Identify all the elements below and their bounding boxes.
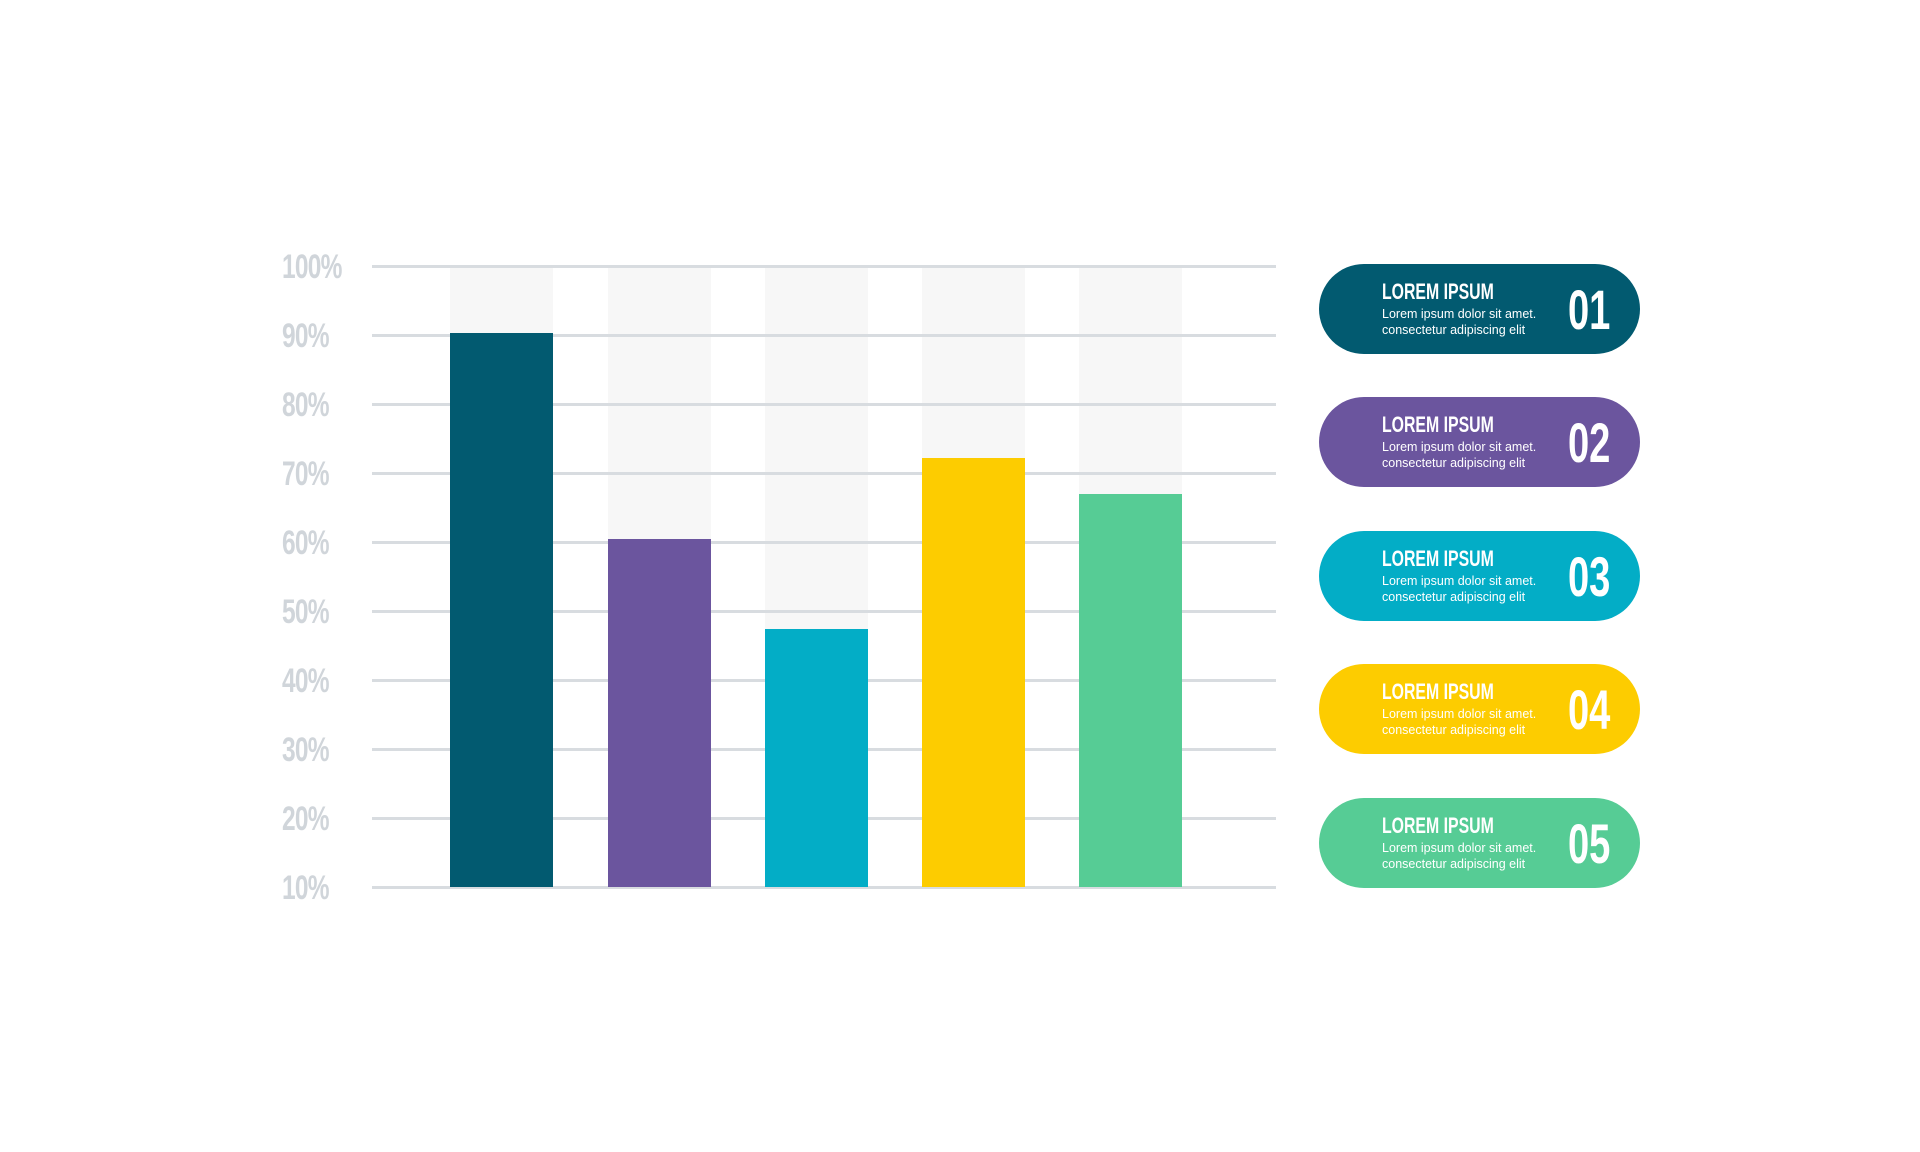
legend pill 02: LOREM IPSUM (1382, 412, 1494, 437)
legend pill 03: consectetur adipiscing elit (1382, 590, 1525, 604)
legend pill 01 (1319, 264, 1640, 354)
chart (282, 248, 1276, 907)
chart: 50% (282, 593, 329, 631)
chart: 70% (282, 455, 329, 493)
legend pill 01: LOREM IPSUM (1382, 279, 1494, 304)
bar 1 (450, 333, 553, 887)
legend pill 03: LOREM IPSUM (1382, 546, 1494, 571)
legend pill 01: 01 (1568, 278, 1610, 341)
legend pill 03: Lorem ipsum dolor sit amet. (1382, 574, 1536, 588)
gridlines (372, 265, 1276, 889)
chart: 60% (282, 524, 329, 562)
legend pill 04: 04 (1568, 678, 1610, 741)
chart: 10% (282, 869, 329, 907)
legend pill 05: LOREM IPSUM (1382, 813, 1494, 838)
legend pill 02: 02 (1568, 411, 1610, 474)
legend pill 03: 03 (1568, 545, 1610, 608)
legend pill 02: Lorem ipsum dolor sit amet. (1382, 440, 1536, 454)
chart: 80% (282, 386, 329, 424)
chart: 20% (282, 800, 329, 838)
bar 2 (608, 539, 711, 887)
bar backgrounds (280, 249, 1280, 251)
bar 3 (765, 629, 868, 887)
bar 4 (922, 458, 1025, 887)
chart: 100% (282, 248, 342, 286)
y axis labels (282, 248, 342, 907)
legend pill 05: consectetur adipiscing elit (1382, 856, 1525, 870)
legend pill 04 (1319, 664, 1640, 754)
bar 5 (1079, 494, 1182, 887)
legend pill 03 (1319, 531, 1640, 621)
legend pill 04: consectetur adipiscing elit (1382, 722, 1525, 736)
chart: 90% (282, 317, 329, 355)
legend pill 01: consectetur adipiscing elit (1382, 322, 1525, 336)
chart: 40% (282, 662, 329, 700)
legend pill 04: LOREM IPSUM (1382, 679, 1494, 704)
chart: 30% (282, 731, 329, 769)
legend pill 05 (1319, 798, 1640, 888)
legend pill 04: Lorem ipsum dolor sit amet. (1382, 707, 1536, 721)
legend pill 02: consectetur adipiscing elit (1382, 456, 1525, 470)
legend pill 05: 05 (1568, 812, 1610, 875)
legend pill 02 (1319, 397, 1640, 487)
legend pill 05: Lorem ipsum dolor sit amet. (1382, 841, 1536, 855)
legend pill 01: Lorem ipsum dolor sit amet. (1382, 307, 1536, 321)
